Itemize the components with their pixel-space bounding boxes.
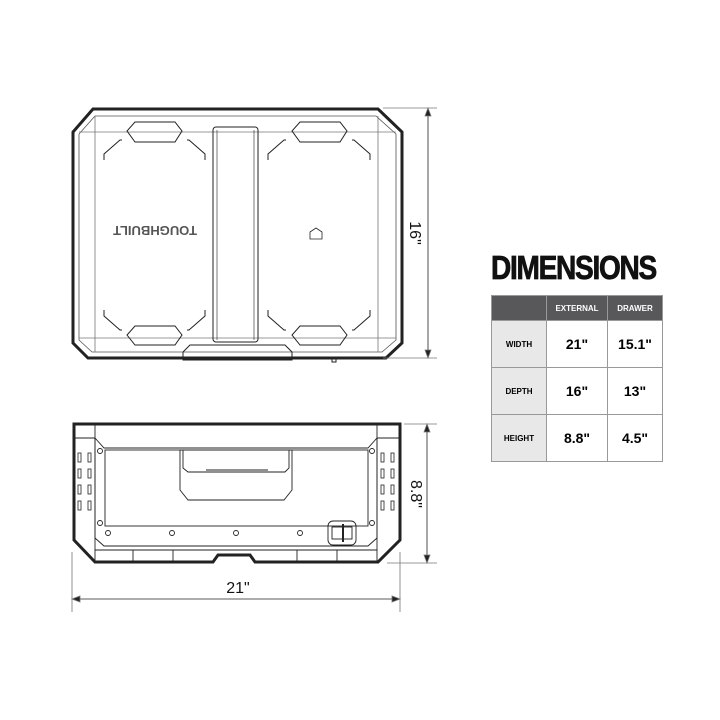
dimensions table (491, 295, 663, 462)
dimensions table: 21" (566, 336, 588, 352)
dimensions table: DEPTH (505, 386, 533, 396)
dimensions table: EXTERNAL (555, 304, 599, 312)
dimension: 8.8 inch (387, 424, 437, 563)
dimensions table: 16" (566, 383, 588, 399)
dimension: 21 inch (72, 552, 400, 612)
logo text: TOUGHBUILT (113, 223, 197, 238)
title: DIMENSIONS (491, 249, 656, 286)
front view of case (74, 424, 400, 562)
dimension: 16 inch (383, 108, 437, 358)
dimensions table: 4.5" (622, 430, 648, 446)
dimensions table: HEIGHT (504, 434, 534, 442)
dimension: 8.8 inch: 8.8" (407, 480, 424, 508)
dimension: 21 inch: 21" (226, 580, 250, 597)
top view of case (73, 109, 402, 362)
dimensions table: 13" (624, 383, 646, 399)
dimensions table: 8.8" (564, 430, 590, 446)
dimensions table: 15.1" (618, 336, 652, 352)
dimensions table: DRAWER (617, 304, 653, 312)
dimensions table: WIDTH (506, 340, 532, 348)
dimension: 16 inch: 16" (406, 221, 423, 245)
